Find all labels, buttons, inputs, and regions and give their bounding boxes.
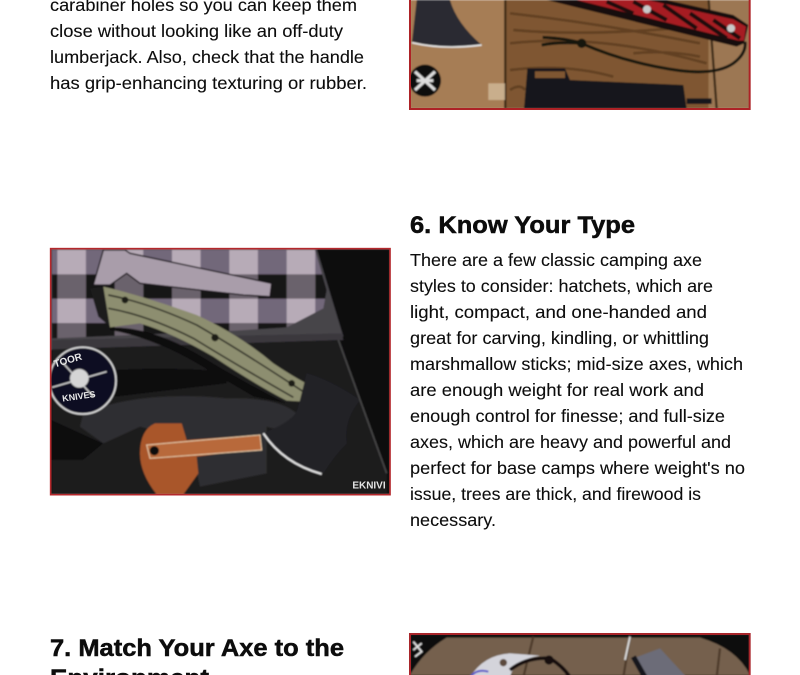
text block: axe types: axes, which are heavy and powerful and [410, 432, 731, 452]
image border [51, 249, 390, 495]
heading: 6. Know Your Type: 6. Know Your Type [410, 212, 635, 239]
text block: axe types: marshmallow sticks; mid-size axes, which [410, 354, 743, 374]
text block: handle advice: close without looking like an off-duty [50, 21, 343, 41]
text block: handle advice: lumberjack. Also, check that the handle [50, 47, 364, 67]
image border [410, 634, 750, 675]
logo text: Toor Knives badge: KNIVES [62, 389, 96, 404]
heading: 7. Match Your Axe to the Environment [50, 635, 344, 675]
text block: axe types: There are a few classic camping axe [410, 250, 702, 270]
text block: axe types: great for carving, kindling, or whittling [410, 328, 709, 348]
text block: axe types: are enough weight for real work and [410, 380, 704, 400]
text block: handle advice [50, 0, 367, 93]
text block: axe types [410, 250, 745, 530]
text block: axe types: necessary. [410, 510, 496, 530]
text block: axe types: issue, trees are thick, and firewood is [410, 484, 701, 504]
photo: axe with red handle on wood [409, 0, 750, 109]
logo text: Knivi watermark: EKNIVI [352, 480, 386, 491]
text block: axe types: light, compact, and one-handed and [410, 302, 707, 322]
logo text: Toor Knives badge: TOOR [53, 352, 83, 370]
photo: Toor Knives axe in presentation box [49, 249, 390, 495]
heading: 7. Match Your Axe to the Environment: 7. Match Your Axe to the [50, 635, 344, 662]
image border [410, 0, 750, 109]
text block: axe types: perfect for base camps where weight's no [410, 458, 745, 478]
logo text: Toor Knives badge [53, 352, 96, 404]
text block: handle advice: has grip-enhancing texturing or rubber. [50, 73, 367, 93]
text block: axe types: enough control for finesse; and full-size [410, 406, 725, 426]
photo: karambit axe on wooden table [410, 634, 750, 675]
text block: axe types: styles to consider: hatchets, which are [410, 276, 713, 296]
